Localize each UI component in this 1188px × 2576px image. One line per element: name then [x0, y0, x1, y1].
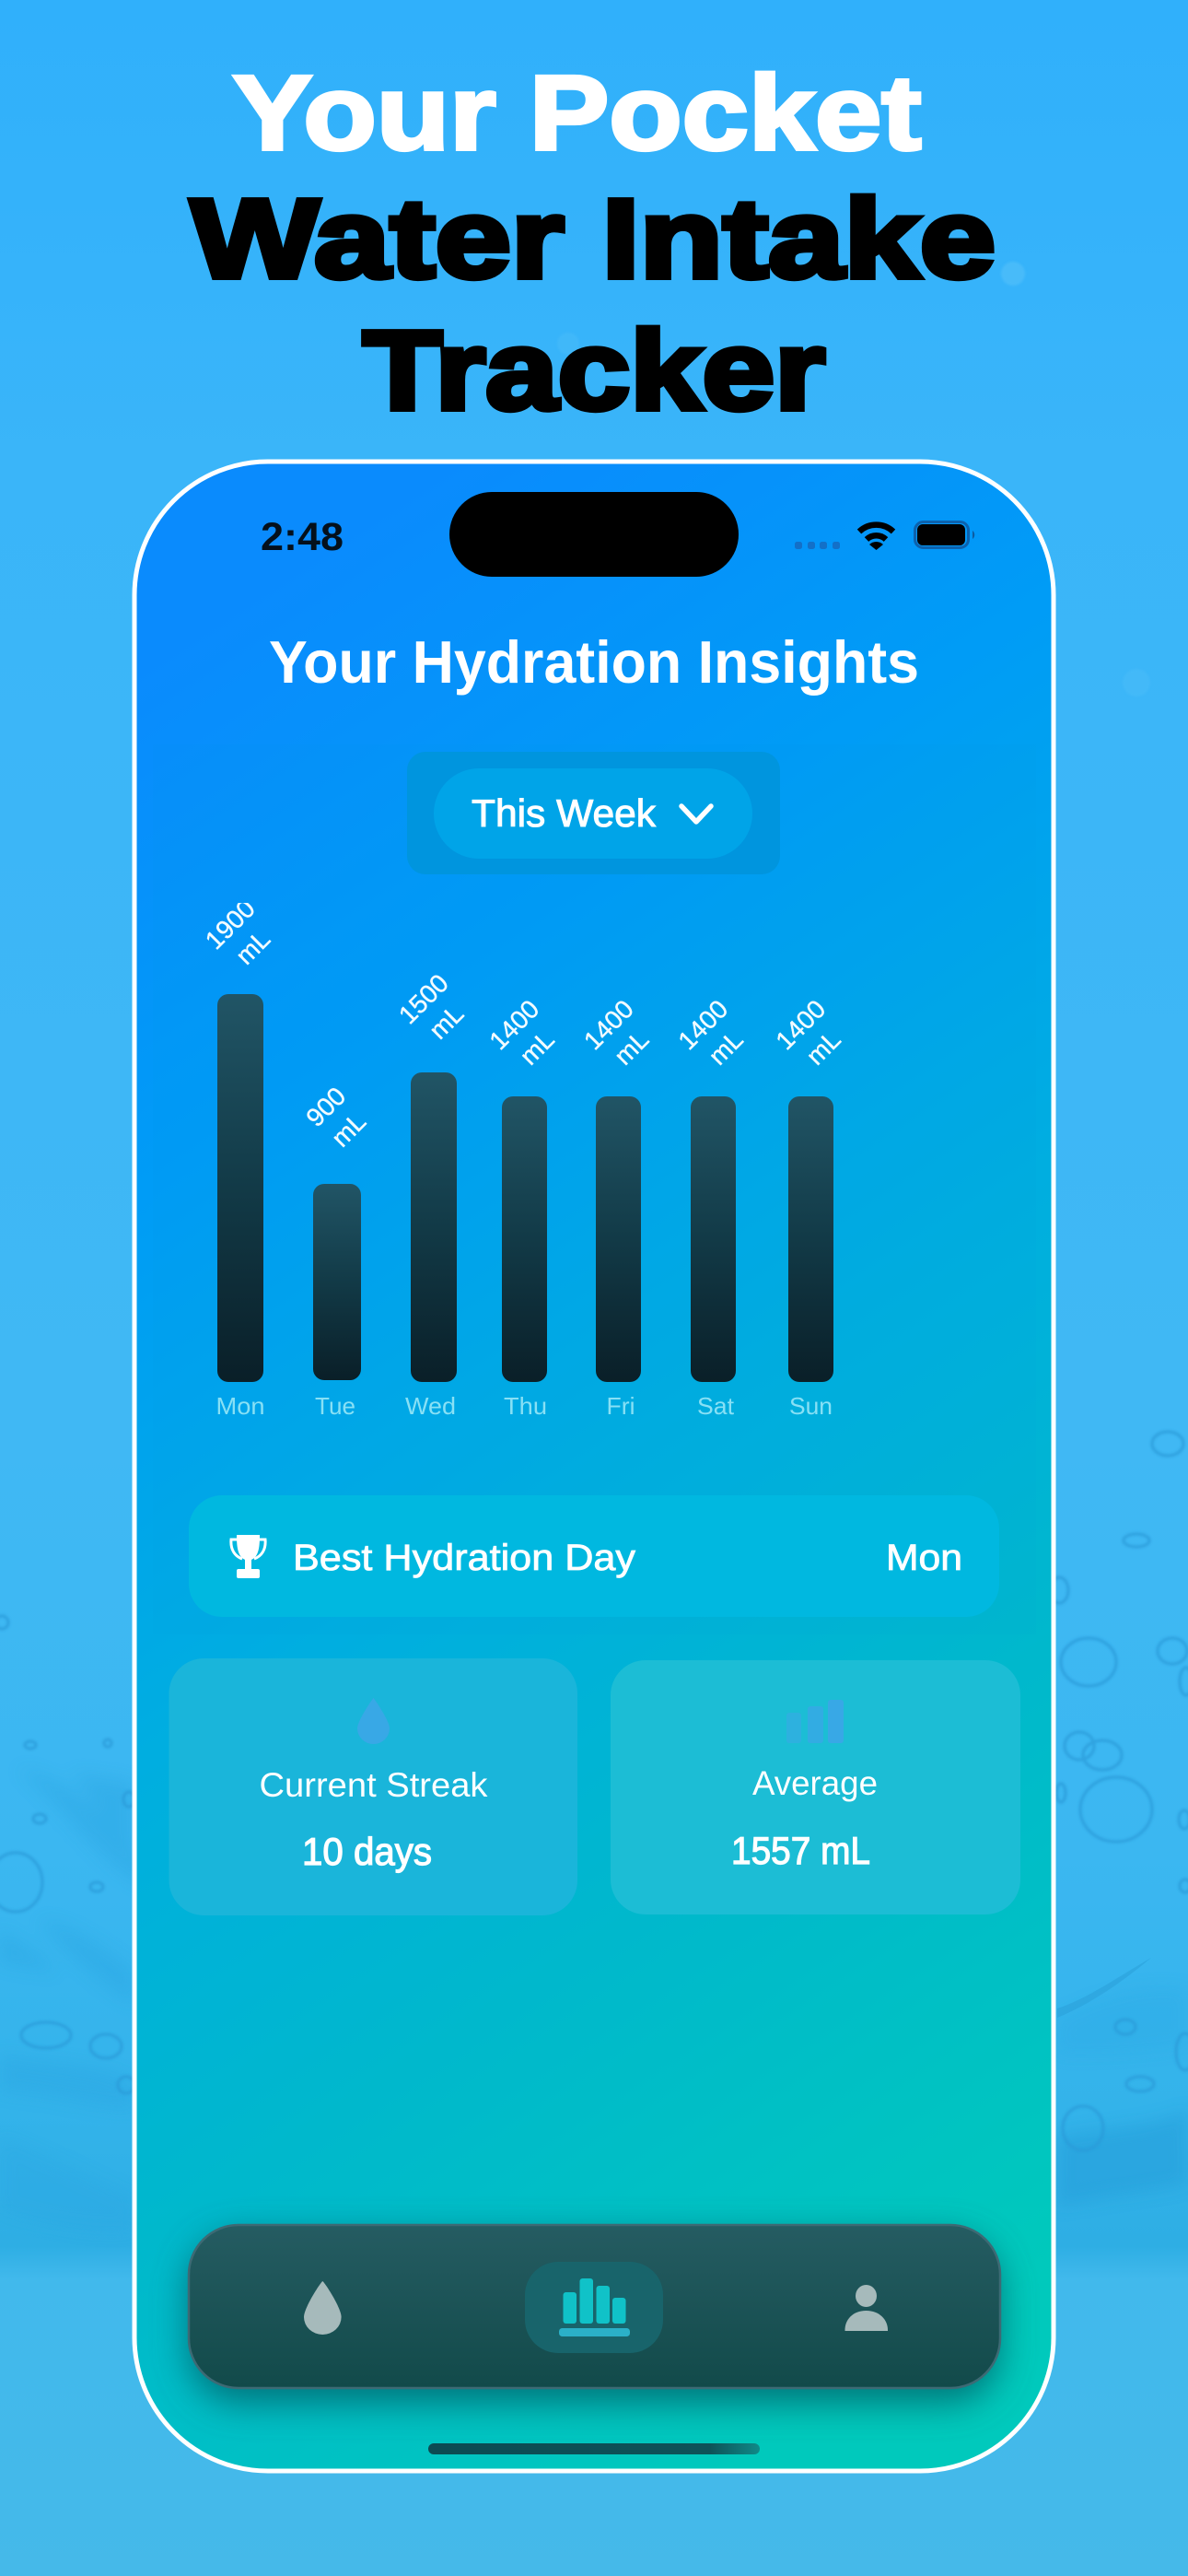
- bar value labels: 1400: [578, 994, 639, 1055]
- value: 1557 mL: [731, 1829, 870, 1872]
- icon: bars: [786, 1700, 844, 1743]
- chart baseline: [559, 2328, 630, 2336]
- dropdown outer panel: [407, 752, 780, 874]
- label: Current Streak: [260, 1766, 488, 1804]
- bar value labels: 1500: [393, 968, 454, 1029]
- day labels: Sat: [697, 1392, 735, 1420]
- label: Average: [752, 1764, 878, 1802]
- bar value labels: 1400: [770, 994, 831, 1055]
- bar value labels: mL: [230, 924, 275, 970]
- signal dots: [795, 542, 840, 549]
- tab bar shadow: [189, 2237, 999, 2403]
- day labels: Sun: [789, 1392, 833, 1420]
- icon: person tab: [844, 2285, 888, 2331]
- icon: water drop tab: [304, 2281, 342, 2335]
- bar value labels: mL: [609, 1025, 654, 1071]
- home indicator: [428, 2443, 760, 2454]
- title: [191, 54, 996, 433]
- heading: Your Hydration Insights: [269, 628, 919, 696]
- background: water waves and bubbles: [0, 262, 1188, 2231]
- day labels: Fri: [606, 1392, 635, 1420]
- bars: [217, 994, 833, 1382]
- bar value labels: 1400: [672, 994, 733, 1055]
- time: 2:48: [261, 515, 344, 559]
- icon: chevron: [681, 806, 711, 822]
- day labels: [215, 1392, 833, 1420]
- icon: trophy: [231, 1535, 265, 1578]
- bar value labels: mL: [703, 1025, 749, 1071]
- panel: best hydration day: [189, 1495, 999, 1617]
- bar value labels: 1400: [483, 994, 544, 1055]
- bar value labels: mL: [800, 1025, 846, 1071]
- bar chart: [200, 894, 854, 1420]
- icon: wifi: [859, 525, 893, 550]
- panel: average: [611, 1660, 1020, 1914]
- bar value labels: 1900: [200, 894, 261, 954]
- icon: water drop: [357, 1698, 390, 1744]
- bar value labels: 900: [300, 1082, 351, 1132]
- icon: battery: [915, 521, 974, 547]
- bar value labels: [200, 894, 854, 1155]
- period dropdown: [407, 752, 780, 874]
- tab bar: [189, 2225, 1000, 2403]
- card background: [611, 1660, 1020, 1914]
- status bar: [261, 492, 974, 577]
- phone screen with white frame: [134, 462, 1054, 2471]
- card label: Best Hydration Day: [293, 1538, 635, 1578]
- dropdown pill: [434, 768, 752, 859]
- day labels: Thu: [504, 1392, 547, 1420]
- bar value labels: mL: [514, 1025, 560, 1071]
- day labels: Mon: [215, 1392, 265, 1420]
- dropdown label: This Week: [472, 791, 657, 835]
- phone mockup: [134, 462, 1054, 2471]
- title line: Your Pocket: Your Pocket: [232, 54, 921, 172]
- icon: chart bars: [564, 2278, 626, 2324]
- bar value labels: mL: [424, 999, 469, 1045]
- bar value labels: mL: [326, 1107, 371, 1153]
- card background: [169, 1658, 577, 1915]
- tab bar background: [189, 2225, 1000, 2388]
- selected tab: insights: [525, 2262, 663, 2353]
- faint chart panel: [153, 744, 1036, 1634]
- value: 10 days: [302, 1830, 432, 1873]
- selected tab background: [525, 2262, 663, 2353]
- day labels: Tue: [315, 1392, 355, 1420]
- day labels: Wed: [405, 1392, 456, 1420]
- card background: [189, 1495, 999, 1617]
- card value: Mon: [886, 1538, 962, 1578]
- title line: Water Intake: Water Intake: [191, 176, 996, 301]
- dynamic island: [449, 492, 739, 577]
- panel: current streak: [169, 1658, 577, 1915]
- title line: Tracker: Tracker: [363, 308, 825, 433]
